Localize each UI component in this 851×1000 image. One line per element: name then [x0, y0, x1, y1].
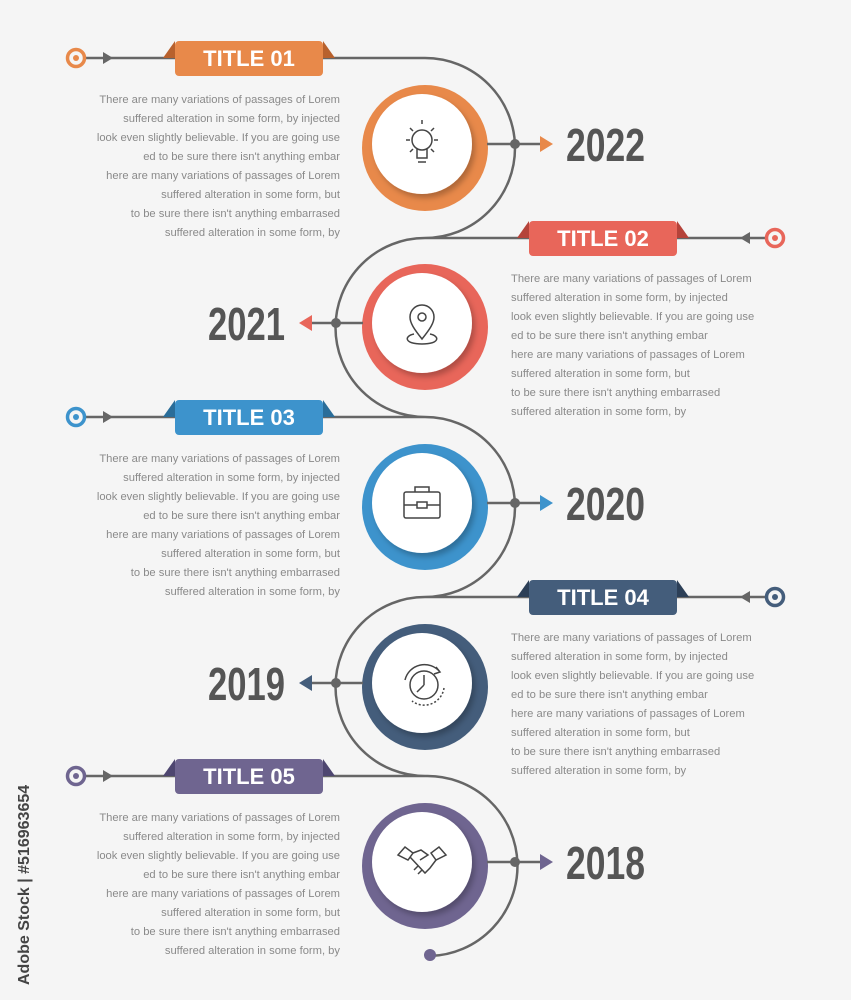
item 4 — [208, 580, 784, 777]
item 2 — [208, 221, 784, 418]
title tab 02: TITLE 02 — [557, 226, 649, 251]
title tab 04 — [517, 580, 689, 615]
text 05: There are many variations of passages of Lorem — [99, 812, 340, 824]
title tab 02 — [517, 221, 689, 256]
year arrow 2019 — [208, 658, 363, 710]
text 02: suffered alteration in some form, but — [511, 368, 691, 380]
year arrow 2021 — [208, 298, 363, 350]
item 5 — [68, 759, 645, 957]
year arrow 2022: 2022 — [566, 119, 645, 171]
text 04: suffered alteration in some form, but — [511, 727, 691, 739]
text 01: to be sure there isn't anything embarrased — [131, 208, 340, 220]
text 01: There are many variations of passages of Lorem — [99, 94, 340, 106]
year arrow 2020: 2020 — [566, 478, 645, 530]
year arrow 2018 — [487, 837, 645, 889]
text 04: suffered alteration in some form, by — [511, 765, 687, 777]
title tab 01: TITLE 01 — [203, 46, 295, 71]
text 02 — [511, 273, 754, 418]
start marker 5 — [68, 768, 113, 784]
text 05: to be sure there isn't anything embarrased — [131, 926, 340, 938]
text 01 — [97, 94, 341, 239]
text 01: here are many variations of passages of Lorem — [106, 170, 340, 182]
watermark side label: Adobe Stock | #516963654 — [16, 785, 33, 985]
year arrow 2018: 2018 — [566, 837, 645, 889]
circle 04 with clock icon — [362, 624, 488, 750]
title tab 01 — [163, 41, 335, 76]
text 03: here are many variations of passages of Lorem — [106, 529, 340, 541]
title tab 03 — [163, 400, 335, 435]
text 03: suffered alteration in some form, by injected — [123, 472, 340, 484]
text 02: to be sure there isn't anything embarrased — [511, 387, 720, 399]
text 04: ed to be sure there isn't anything embar — [511, 689, 708, 701]
text 04: look even slightly believable. If you are going use — [511, 670, 754, 682]
circle 03 with briefcase icon — [362, 444, 488, 570]
text 05: look even slightly believable. If you are going use — [97, 850, 340, 862]
text 03: There are many variations of passages of Lorem — [99, 453, 340, 465]
text 03 — [97, 453, 341, 598]
title tab 04: TITLE 04 — [557, 585, 650, 610]
text 04: here are many variations of passages of Lorem — [511, 708, 745, 720]
text 04: There are many variations of passages of Lorem — [511, 632, 752, 644]
text 02: suffered alteration in some form, by injected — [511, 292, 728, 304]
circle 01 with lightbulb icon — [362, 85, 488, 211]
text 01: suffered alteration in some form, but — [161, 189, 341, 201]
text 03: suffered alteration in some form, but — [161, 548, 341, 560]
start marker 3 — [68, 408, 113, 426]
item 3 — [68, 400, 645, 598]
timeline path — [85, 58, 766, 956]
start marker 1 — [68, 50, 113, 66]
start marker 2 — [740, 230, 784, 246]
text 05 — [97, 812, 341, 957]
circle 05 with handshake icon — [362, 803, 488, 929]
circle 02 with location pin icon — [362, 264, 488, 390]
text 05: suffered alteration in some form, but — [161, 907, 341, 919]
text 05: suffered alteration in some form, by — [165, 945, 340, 957]
text 01: suffered alteration in some form, by injected — [123, 113, 340, 125]
year arrow 2021: 2021 — [208, 298, 285, 350]
text 04: suffered alteration in some form, by injected — [511, 651, 728, 663]
text 02: suffered alteration in some form, by — [511, 406, 687, 418]
text 02: here are many variations of passages of Lorem — [511, 349, 745, 361]
text 04: to be sure there isn't anything embarrased — [511, 746, 720, 758]
title tab 05: TITLE 05 — [203, 764, 295, 789]
year arrow 2019: 2019 — [208, 658, 285, 710]
end dot — [424, 949, 436, 961]
text 02: look even slightly believable. If you are going use — [511, 311, 754, 323]
text 05: suffered alteration in some form, by injected — [123, 831, 340, 843]
item 1 — [68, 41, 645, 239]
title tab 03: TITLE 03 — [203, 405, 295, 430]
text 03: to be sure there isn't anything embarrased — [131, 567, 340, 579]
year arrow 2020 — [487, 478, 645, 530]
text 05: here are many variations of passages of Lorem — [106, 888, 340, 900]
text 01: ed to be sure there isn't anything embar — [143, 151, 340, 163]
text 01: suffered alteration in some form, by — [165, 227, 340, 239]
title tab 05 — [163, 759, 335, 794]
text 03: look even slightly believable. If you are going use — [97, 491, 340, 503]
start marker 4 — [740, 588, 784, 606]
year arrow 2022 — [487, 119, 645, 171]
text 01: look even slightly believable. If you are going use — [97, 132, 340, 144]
text 04 — [511, 632, 754, 777]
text 02: There are many variations of passages of Lorem — [511, 273, 752, 285]
text 05: ed to be sure there isn't anything embar — [143, 869, 340, 881]
text 03: suffered alteration in some form, by — [165, 586, 340, 598]
text 02: ed to be sure there isn't anything embar — [511, 330, 708, 342]
text 03: ed to be sure there isn't anything embar — [143, 510, 340, 522]
